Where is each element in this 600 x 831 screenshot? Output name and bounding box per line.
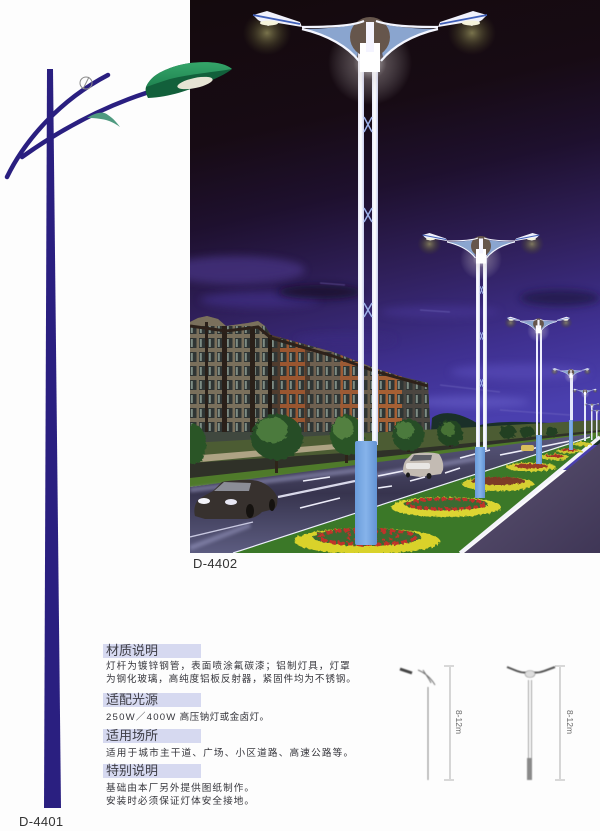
- technical drawing: double-arm lamp: [507, 666, 575, 780]
- text: applications: 适用于城市主干道、广场、小区道路、高速公路等。: [106, 748, 354, 759]
- car: distant yellow car: [521, 445, 534, 451]
- lamp post 2: [418, 233, 544, 498]
- right carriageway: [464, 443, 600, 553]
- text: light source: 250W／400W 高压钠灯或金卤灯。: [106, 712, 270, 723]
- heading: material: [103, 644, 201, 658]
- upper curved arm: [7, 75, 108, 177]
- text: notes line 2: 安装时必须保证灯体安全接地。: [106, 796, 255, 807]
- night sky: [165, 0, 600, 470]
- lamp post 1: nearest: [243, 11, 496, 545]
- text: material line 2: 为钢化玻璃，高纯度铝板反射器，紧固件均为不锈钢。: [106, 674, 357, 685]
- apartment building: [190, 310, 435, 445]
- heading: applications: 适用场所: [106, 728, 158, 743]
- lamp post 3: [504, 317, 573, 464]
- small ring ornament: [80, 77, 92, 89]
- drawing pole and arm: [400, 669, 435, 780]
- car: silver car: [403, 452, 443, 479]
- technical drawing: single-arm lamp: [400, 666, 464, 780]
- heading: light source: [103, 693, 201, 707]
- label: D-4401: D-4401: [19, 814, 63, 829]
- lamp head: green leaf: [146, 62, 232, 98]
- trees: [180, 414, 558, 473]
- left carriageway: [190, 434, 590, 553]
- drawing pole and arms: [507, 667, 555, 780]
- height dimension line: [444, 666, 454, 780]
- lamp post 7: [591, 409, 600, 440]
- lamp post 5: [572, 389, 598, 441]
- lower curved arm: [22, 93, 146, 157]
- heading: material: 材质说明: [106, 643, 158, 658]
- right kerb line: [460, 437, 600, 553]
- height dimension line: [555, 666, 565, 780]
- roadside ground: green lawn: [196, 420, 600, 463]
- text: material line 1: 灯杆为镀锌钢管，表面喷涂氟碳漆；铝制灯具，灯罩: [106, 661, 351, 672]
- heading: light source: 适配光源: [106, 692, 158, 707]
- roadside ground: pale path: [190, 444, 338, 463]
- central green median: [233, 436, 597, 553]
- car: dark sports car: [194, 480, 277, 519]
- heading: special notes: 特别说明: [106, 763, 158, 778]
- height label: 8-12m: [565, 710, 575, 734]
- roadside ground: green verge: [190, 432, 600, 487]
- pole shaft: [44, 69, 61, 808]
- flower beds: [294, 442, 592, 554]
- lamp post 4: [551, 368, 591, 450]
- photo: street at night: [165, 0, 600, 554]
- heading: special notes: [103, 764, 201, 778]
- median white kerb: [233, 437, 590, 553]
- leaf-shaped lamp post D-4401: [7, 62, 232, 808]
- lamp post 6: [584, 403, 600, 440]
- roadside ground: dark kerb wall: [190, 430, 600, 479]
- heading: applications: [103, 729, 201, 743]
- small leaf: [87, 113, 120, 127]
- text: notes line 1: 基础由本厂另外提供图纸制作。: [106, 783, 255, 794]
- lamp lens: [176, 74, 214, 92]
- label: D-4402: D-4402: [193, 556, 237, 571]
- height label: 8-12m: [454, 710, 464, 734]
- distant tree line: [430, 413, 600, 445]
- road highlights and lane marks: [190, 441, 570, 548]
